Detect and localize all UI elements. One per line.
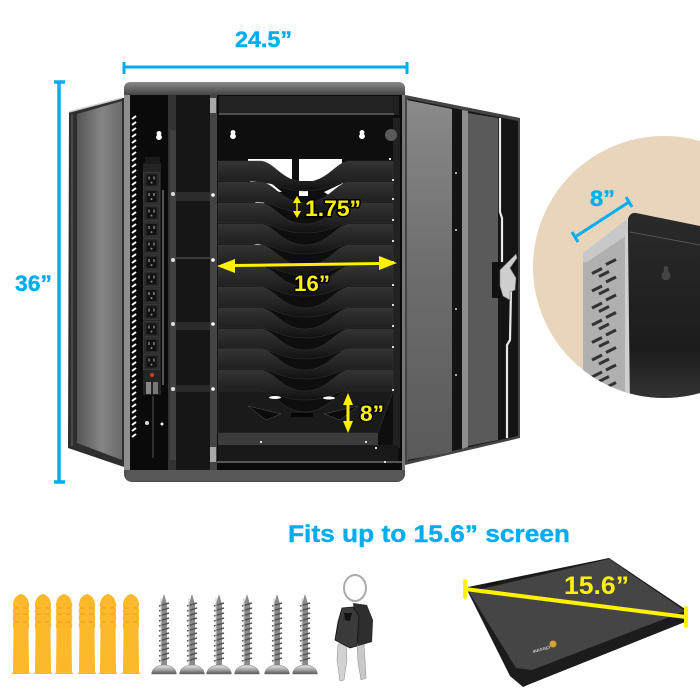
icon: door latch	[492, 254, 517, 300]
laptop shelves	[218, 161, 393, 433]
dimension: height 36 inches	[15, 82, 65, 482]
bottom ledge	[218, 433, 378, 445]
icon: mounting screws	[152, 594, 318, 674]
icon: laptop: chrome	[532, 644, 551, 654]
icon: wall anchors	[12, 594, 140, 674]
right compartment back wall	[217, 95, 400, 462]
dimension: slot depth 8 inches: 8”	[360, 401, 384, 426]
cabinet front face	[628, 213, 700, 410]
panel: cabinet body	[124, 82, 405, 482]
dimension: depth 8 inches: 8”	[590, 186, 615, 211]
dimension: height 36 inches: 36”	[15, 271, 52, 296]
icon: laptop: 15.6”	[564, 572, 629, 600]
panel: left door	[68, 98, 124, 467]
logo	[550, 640, 556, 648]
middle compartment	[176, 95, 210, 470]
right divider post	[210, 95, 217, 470]
icon: laptop	[465, 558, 688, 687]
dimension: shelf width 16 inches	[217, 256, 397, 296]
cabinet side face	[583, 236, 628, 393]
dimension: diagonal 15.6 inches	[465, 589, 686, 617]
perforated rail	[132, 116, 136, 437]
panel: right door	[405, 95, 520, 465]
icon: power strip	[143, 157, 164, 458]
ventilation slots	[592, 260, 616, 388]
door lock rod	[500, 118, 511, 438]
panel: depth detail circle	[533, 136, 700, 410]
keyhole	[661, 266, 670, 280]
dimension: shelf width 16 inches: 16”	[294, 271, 330, 296]
wall-mount keyholes	[230, 130, 236, 139]
dimension: width 24.5 inches: 24.5”	[235, 27, 292, 52]
dimension: width 24.5 inches	[124, 27, 407, 74]
see-through openings	[248, 159, 292, 181]
dimension: slot depth 8 inches	[343, 393, 384, 433]
heading: screen size: Fits up to 15.6” screen	[288, 521, 570, 548]
shelf rivets	[260, 158, 394, 463]
left compartment keyhole	[156, 131, 162, 140]
dimension: slot spacing 1.75 inches: 1.75”	[305, 196, 361, 221]
dimension: depth 8 inches	[572, 186, 632, 242]
centre divider post	[168, 95, 176, 470]
icon: keys	[335, 575, 373, 681]
